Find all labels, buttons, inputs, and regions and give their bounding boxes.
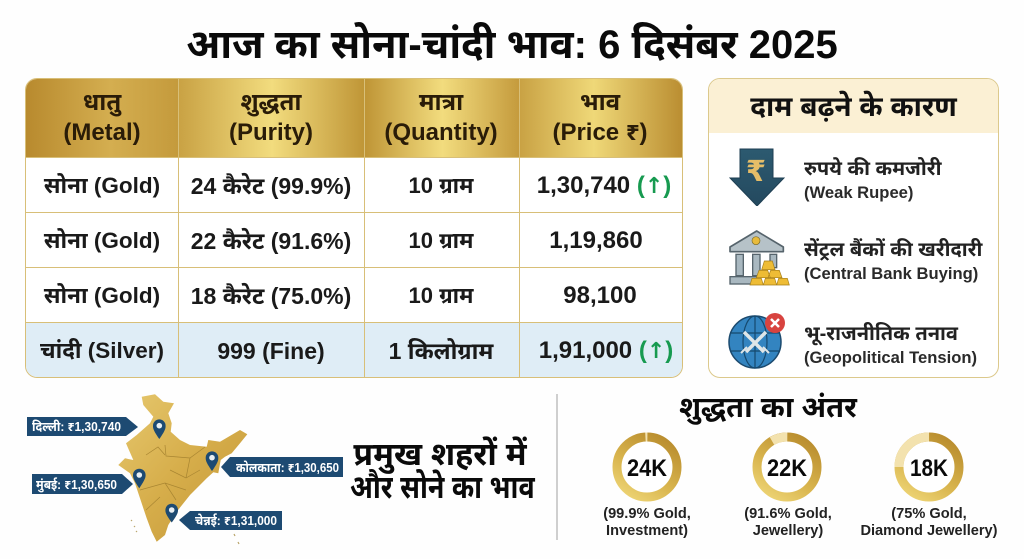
reason: weak rupee bbox=[804, 157, 942, 202]
row: gold 22 carat: 22 कैरेट (91.6%) bbox=[191, 228, 351, 254]
row: gold 22 carat: 10 ग्राम bbox=[408, 228, 474, 253]
heading: city prices: प्रमुख शहरों में bbox=[353, 436, 527, 472]
panel heading: दाम बढ़ने के कारण bbox=[750, 91, 957, 122]
pin: Kolkata bbox=[206, 451, 218, 471]
heading: city prices: और सोने का भाव bbox=[350, 469, 535, 505]
ring chart: 18K: 18K bbox=[910, 455, 949, 482]
caption: 24K: Investment) bbox=[606, 523, 688, 539]
header: metal: धातु bbox=[83, 89, 121, 116]
row: gold 18 carat: 10 ग्राम bbox=[408, 283, 474, 308]
row: gold 24 carat: 1,30,740 (↑) bbox=[537, 172, 671, 199]
header cell band: metal bbox=[26, 79, 179, 158]
label: Mumbai: मुंबई: ₹1,30,650 bbox=[36, 477, 117, 494]
row: gold 22 carat bbox=[44, 227, 643, 254]
section divider bbox=[556, 394, 558, 540]
header: price: (Price ₹) bbox=[552, 119, 648, 146]
header cell band: purity bbox=[179, 79, 365, 158]
row: gold 18 carat bbox=[44, 282, 637, 309]
header: purity: (Purity) bbox=[229, 119, 313, 146]
caption: 22K: (91.6% Gold, bbox=[744, 506, 832, 522]
label: Chennai: चेन्नई: ₹1,31,000 bbox=[195, 513, 277, 528]
ring chart: 22K bbox=[752, 432, 822, 502]
heading: city prices bbox=[350, 436, 536, 505]
caption: 24K bbox=[603, 506, 691, 539]
header: quantity: मात्रा bbox=[419, 89, 463, 116]
pin: Delhi bbox=[153, 419, 166, 439]
pin: Mumbai bbox=[133, 469, 146, 488]
header: price: भाव bbox=[580, 89, 620, 116]
reason: weak rupee: (Weak Rupee) bbox=[804, 183, 913, 202]
panel: reasons for price rise bbox=[708, 78, 999, 378]
reason: central bank buying bbox=[804, 238, 983, 283]
row: gold 18 carat: 18 कैरेट (75.0%) bbox=[191, 283, 351, 309]
map: India with city prices bbox=[27, 394, 343, 544]
caption: 18K bbox=[860, 506, 998, 539]
label: Kolkata bbox=[221, 457, 343, 477]
India outline bbox=[118, 394, 247, 542]
header cell band: price bbox=[520, 79, 684, 158]
label: Kolkata: कोलकाता: ₹1,30,650 bbox=[236, 460, 339, 475]
icon: bank with gold bars bbox=[729, 230, 790, 286]
label: Delhi: दिल्ली: ₹1,30,740 bbox=[32, 419, 121, 434]
row: gold 24 carat: सोना (Gold) bbox=[44, 173, 160, 198]
reason: central bank buying: (Central Bank Buying) bbox=[804, 264, 978, 283]
ring chart: 22K: 22K bbox=[767, 455, 808, 482]
row: gold 24 carat: 10 ग्राम bbox=[408, 173, 474, 198]
row: gold 22 carat: सोना (Gold) bbox=[44, 228, 160, 253]
header: metal bbox=[63, 89, 141, 146]
islands bbox=[131, 520, 239, 544]
panel heading bbox=[709, 79, 998, 133]
row: silver: 1,91,000 (↑) bbox=[539, 337, 673, 364]
reason: central bank buying: सेंट्रल बैंकों की खरीदारी bbox=[804, 239, 982, 261]
reason: geopolitical tension: (Geopolitical Tension) bbox=[804, 348, 977, 367]
ring chart: 24K bbox=[612, 432, 682, 502]
row: silver: 999 (Fine) bbox=[217, 338, 325, 364]
row: gold 18 carat: 98,100 bbox=[563, 282, 637, 309]
row: silver: चांदी (Silver) bbox=[40, 338, 164, 363]
icon: falling rupee: ₹ bbox=[746, 156, 766, 188]
silver row background bbox=[26, 323, 684, 379]
reason: geopolitical tension bbox=[804, 322, 977, 367]
header cell band: quantity bbox=[365, 79, 520, 158]
pin: Chennai bbox=[165, 504, 178, 522]
icon: falling rupee bbox=[729, 148, 785, 206]
row: gold 18 carat: सोना (Gold) bbox=[44, 283, 160, 308]
row: silver: 1 किलोग्राम bbox=[389, 338, 493, 364]
header: metal: (Metal) bbox=[63, 119, 141, 146]
caption: 24K: (99.9% Gold, bbox=[603, 506, 691, 522]
header: quantity bbox=[384, 89, 498, 146]
title: आज का सोना-चांदी भाव: 6 दिसंबर 2025 bbox=[186, 23, 838, 67]
row: silver bbox=[40, 337, 673, 364]
row: gold 22 carat: 1,19,860 bbox=[549, 227, 643, 254]
header: purity bbox=[229, 89, 313, 146]
header: quantity: (Quantity) bbox=[384, 119, 498, 146]
header: purity: शुद्धता bbox=[241, 89, 301, 116]
label: Mumbai bbox=[32, 474, 133, 494]
label: Delhi bbox=[27, 417, 138, 436]
heading: purity difference: शुद्धता का अंतर bbox=[679, 392, 857, 424]
caption: 18K: Diamond Jewellery) bbox=[860, 523, 998, 539]
reason: geopolitical tension: भू-राजनीतिक तनाव bbox=[804, 323, 958, 345]
caption: 22K: Jewellery) bbox=[753, 523, 823, 539]
label: Chennai bbox=[179, 511, 282, 530]
panel: price table bbox=[25, 78, 683, 378]
caption: 22K bbox=[744, 506, 832, 539]
caption: 18K: (75% Gold, bbox=[891, 506, 967, 522]
ring chart: 24K: 24K bbox=[627, 455, 668, 482]
row: gold 24 carat bbox=[44, 172, 671, 199]
header: price bbox=[552, 89, 648, 146]
reason: weak rupee: रुपये की कमजोरी bbox=[804, 158, 941, 180]
ring chart: 18K bbox=[894, 432, 964, 502]
icon: globe with swords bbox=[728, 313, 785, 369]
row: gold 24 carat: 24 कैरेट (99.9%) bbox=[191, 173, 351, 199]
